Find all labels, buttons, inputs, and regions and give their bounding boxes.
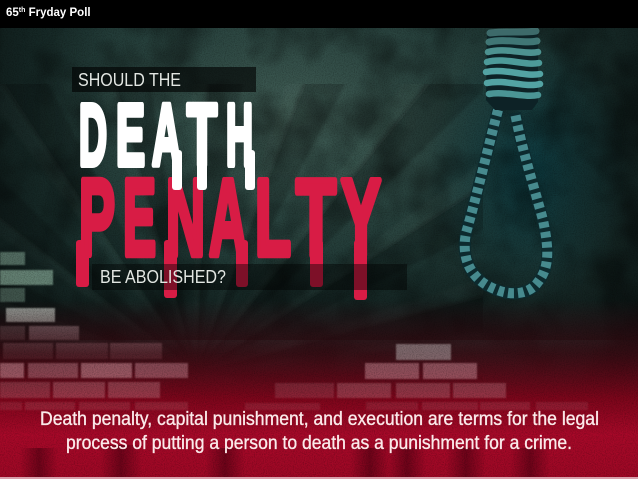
headline: death: A [152,87,181,184]
top title bar [0,0,638,28]
headline: penalty: T [296,157,336,279]
headline: penalty [76,176,382,300]
red gradient floor [0,300,638,479]
description text: process of putting a person to death as a punishment for a crime. [66,432,572,454]
headline: penalty: L [255,157,291,279]
poll title: th [19,7,25,14]
rope knot coils [486,30,540,110]
headline: penalty: A [209,157,247,279]
brick wall: left [0,252,162,359]
headline: penalty: P [79,157,115,279]
label band: be abolished [92,264,407,290]
brick wall: right [245,344,588,410]
headline: penalty: E [123,157,156,279]
headline: death: D [79,87,107,184]
infographic canvas: H [226,87,253,184]
poll title: Fryday Poll [25,7,91,19]
rope loop [465,110,547,293]
bottom edge strip [0,477,638,479]
headline: death: T [187,87,217,184]
label band: should the [72,67,256,92]
headline: death [80,102,255,190]
background: dark green wall [0,28,638,367]
poll title: 65 [6,7,19,19]
headline: penalty: Y [341,157,381,279]
headline: death: E [116,87,145,184]
red curtain folds at bottom [20,445,550,477]
headline: penalty: N [166,157,205,279]
label band: should the: SHOULD THE [78,70,181,90]
noose [465,30,547,293]
description text [40,408,599,454]
label band: be abolished: BE ABOLISHED? [100,267,226,287]
brick wall: lower rows [0,363,188,410]
